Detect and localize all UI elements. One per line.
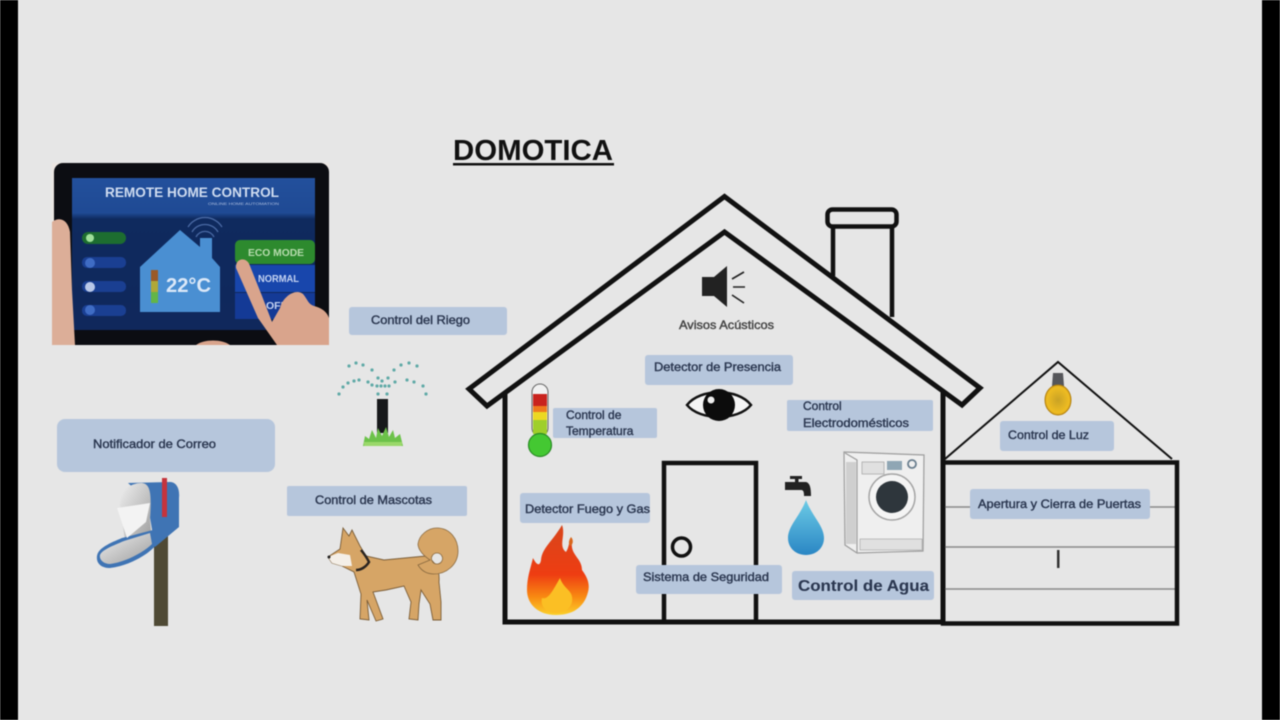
label: Notificador de Correo: Notificador de Correo (93, 437, 216, 451)
tablet screen (72, 178, 315, 330)
label: Sistema de Seguridad: Sistema de Seguridad (643, 570, 769, 584)
label: Control Electrodomésticos: Control (803, 399, 842, 413)
tablet house icon (140, 230, 220, 312)
label: Control de Temperatura: Control de (566, 408, 622, 422)
right hand (236, 259, 329, 345)
garage handle (1057, 550, 1060, 568)
label: Detector Fuego y Gas: Detector Fuego y Gas (525, 502, 650, 516)
label: Control de Mascotas: Control de Mascotas (315, 493, 432, 507)
label: Apertura y Cierra de Puertas (970, 489, 1150, 519)
label: Control de Agua: Control de Agua (798, 578, 929, 595)
label: Notificador de Correo (57, 419, 275, 472)
label: Control Electrodomésticos (787, 399, 933, 431)
icon: sprinkler (337, 361, 428, 446)
chimney (828, 210, 896, 317)
label: Control del Riego (349, 307, 507, 335)
door (664, 463, 756, 620)
tablet side controls (82, 232, 126, 316)
label: Detector Fuego y Gas (520, 493, 650, 523)
label: Avisos Acústicos: Avisos Acústicos (679, 318, 774, 332)
icon: eye (687, 389, 751, 421)
label: Control de Luz: Control de Luz (1008, 428, 1089, 442)
garage frame (943, 462, 1177, 624)
panel: remote home control tablet (52, 163, 329, 345)
label: Control de Temperatura (553, 408, 657, 438)
label: Detector de Presencia: Detector de Presencia (654, 360, 781, 374)
temperature meter (151, 270, 158, 303)
icon: washing machine (844, 452, 924, 553)
main house walls (505, 388, 943, 622)
mode buttons: NORMAL (258, 273, 300, 285)
label: Detector de Presencia (645, 355, 793, 385)
label: Control de Mascotas (287, 486, 467, 516)
title: DOMOTICA (453, 135, 613, 167)
label: Control Electrodomésticos: Electrodomésticos (803, 416, 909, 430)
mode buttons: OFF (266, 300, 288, 312)
tablet heading: REMOTE HOME CONTROL (105, 185, 279, 200)
garage slats (945, 507, 1175, 589)
wifi arcs (188, 218, 222, 237)
garage (943, 362, 1177, 624)
panel: remote home control tablet: ONLINE HOME AUTOMATION (208, 201, 279, 206)
mode buttons: ECO MODE (248, 247, 304, 259)
icon: thermometer (528, 384, 552, 456)
label: Control del Riego: Control del Riego (371, 313, 470, 327)
icon: mailbox (97, 478, 179, 626)
label: Sistema de Seguridad (636, 565, 782, 594)
icon: dog (328, 528, 458, 621)
garage roof (945, 362, 1172, 459)
temperature reading: 22°C (166, 275, 211, 297)
mode buttons (235, 240, 315, 319)
icon: water drop (788, 500, 824, 555)
label: Control de Temperatura: Temperatura (566, 424, 634, 438)
house outline (469, 196, 980, 622)
label: Apertura y Cierra de Puertas: Apertura y Cierra de Puertas (978, 497, 1141, 511)
icon: flame (527, 525, 589, 615)
label: Control de Luz (1000, 421, 1114, 451)
icon: speaker (702, 266, 745, 307)
icon: light bulb (1045, 373, 1071, 415)
left hand (52, 219, 75, 345)
label: Control de Agua (792, 571, 934, 600)
roof (469, 196, 980, 406)
icon: water tap (785, 476, 811, 496)
